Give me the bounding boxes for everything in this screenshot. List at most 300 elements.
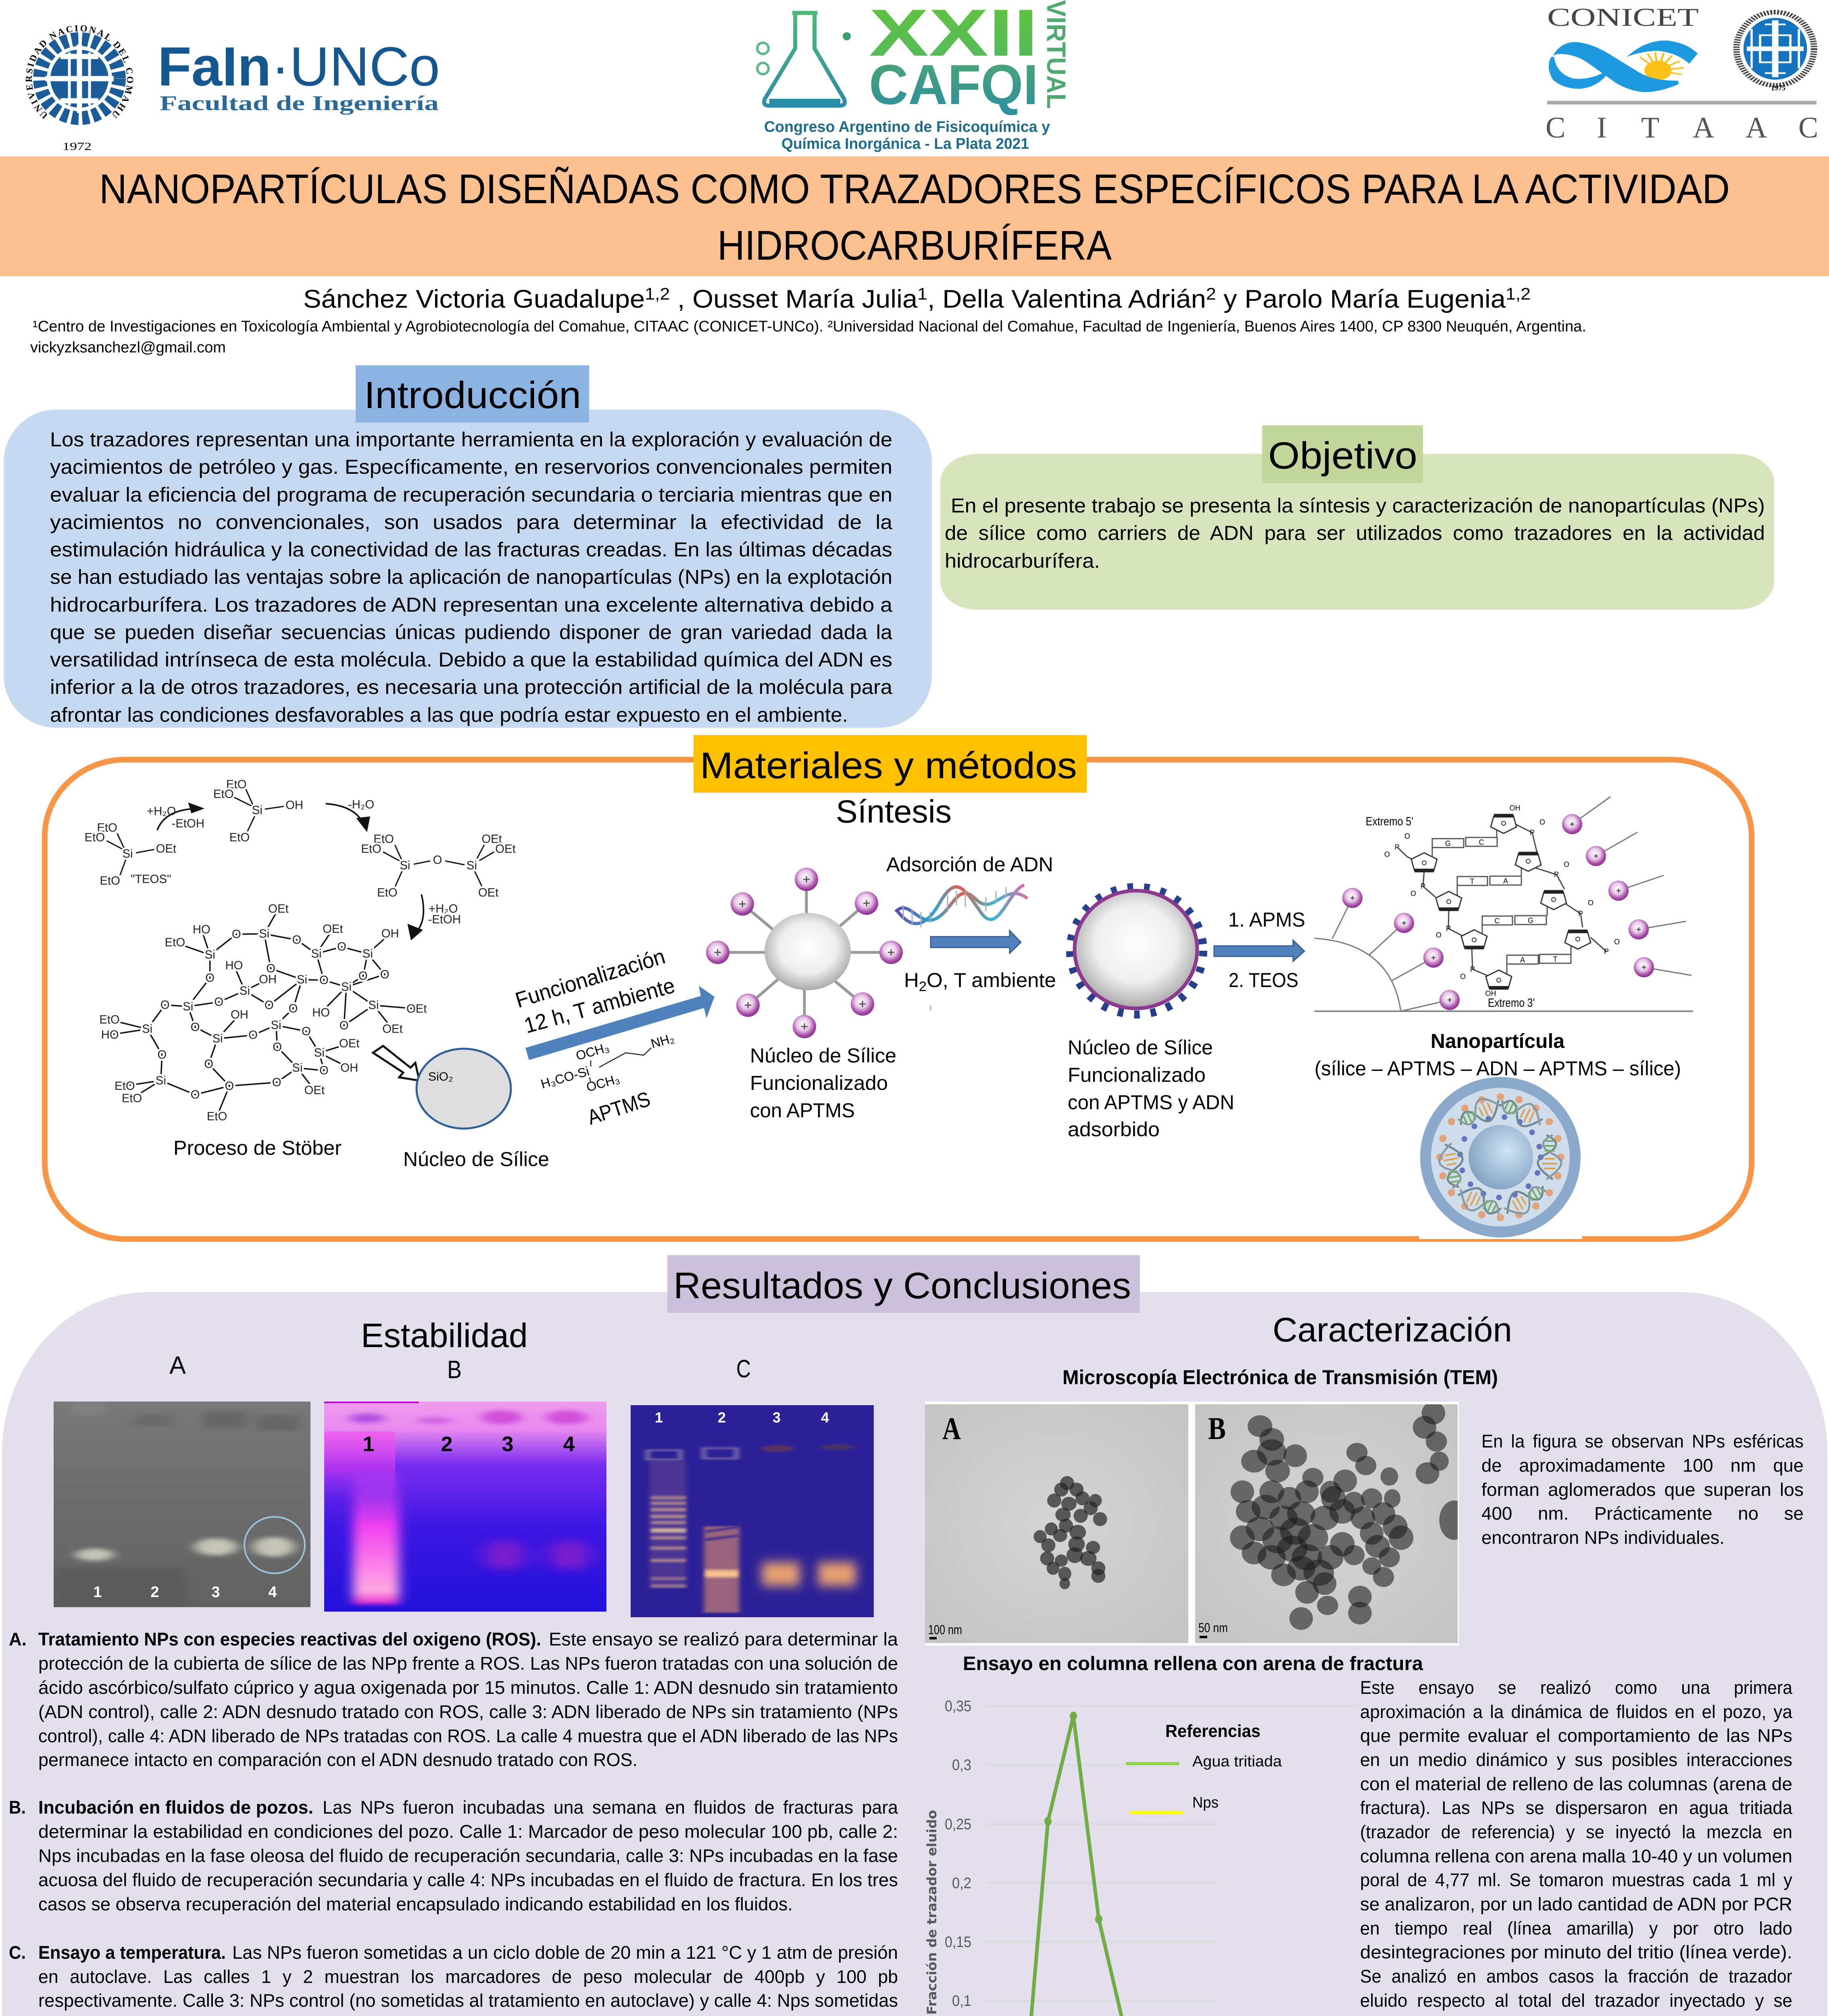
diagram: DNA on APTMS surface: P bbox=[1421, 882, 1425, 890]
diagram: DNA on APTMS surface: P bbox=[1604, 948, 1609, 956]
subheading: column test: Ensayo en columna rellena con arena de fractura bbox=[963, 1653, 1423, 1674]
TEM micrographs bbox=[925, 1402, 1469, 1645]
chemistry: Stöber process: HO bbox=[225, 959, 243, 972]
diagram: DNA on APTMS surface: T bbox=[1553, 955, 1557, 963]
label: núcleo con aptms y adn bbox=[1068, 1036, 1234, 1141]
text: column test description: que permite evaluar el comportamiento de las NPs bbox=[1360, 1725, 1792, 1746]
label: núcleo con aptms y adn: adsorbido bbox=[1068, 1118, 1160, 1141]
chemistry: Stöber process: O bbox=[160, 998, 170, 1012]
paragraph C: C. bbox=[9, 1942, 26, 1963]
chart: elution curves bbox=[924, 1698, 1541, 2016]
paragraph A: ácido ascórbico/sulfato cúprico y agua oxigenada por 15 minutos. Calle 1: ADN desnudo sin tratamiento bbox=[38, 1677, 898, 1698]
text: column test description: aproximación a la dinámica de fluidos en el pozo, ya bbox=[1360, 1702, 1793, 1722]
intro text: que se pueden diseñar secuencias únicas pudiendo disponer de gran variedad dada la bbox=[50, 621, 892, 644]
diagram: DNA on APTMS surface: Extremo 5' bbox=[1366, 815, 1413, 828]
chemistry: Stöber process: O bbox=[205, 971, 215, 985]
y axis labels: 0,1 bbox=[952, 1993, 971, 2010]
chemistry: Stöber process: Si bbox=[123, 847, 133, 860]
diagram: DNA on APTMS surface bbox=[1314, 797, 1693, 1011]
authors: , Ousset María Julia bbox=[670, 285, 918, 313]
chemistry: Stöber process: OH bbox=[231, 1008, 248, 1021]
molecule: APTMS: APTMS bbox=[585, 1087, 653, 1129]
white mask under nanoparticle image bbox=[1419, 1234, 1582, 1239]
logo: CONICET CITAAC: I bbox=[1597, 111, 1607, 144]
y axis labels: 0,25 bbox=[945, 1816, 971, 1833]
gel image A bbox=[54, 1402, 310, 1608]
gel label C: C bbox=[736, 1355, 751, 1383]
label: núcleo de sílice: Núcleo de Sílice bbox=[403, 1148, 549, 1170]
gel image B bbox=[324, 1402, 606, 1612]
authors: Sánchez Victoria Guadalupe bbox=[303, 285, 625, 313]
paragraph A bbox=[9, 1629, 898, 1770]
chemistry: Stöber process: Si bbox=[362, 947, 373, 960]
chemistry: Stöber process: O bbox=[273, 1040, 282, 1054]
logo: CONICET CITAAC: A bbox=[1693, 111, 1714, 144]
label: núcleo funcionalizado con aptms: Funcionalizado bbox=[750, 1072, 888, 1094]
chemistry: Stöber process bbox=[85, 778, 516, 1123]
paragraph B bbox=[9, 1797, 898, 1914]
logo: XXII CAFQI virtual: Congreso Argentino de Fisicoquímica y bbox=[764, 119, 1050, 135]
panel: resultados y conclusiones bbox=[2, 1255, 1827, 2016]
chemistry: Stöber process: Si bbox=[205, 948, 215, 962]
chemistry: Stöber process: OEt bbox=[268, 902, 289, 916]
paragraph A: (ADN control), calle 2: ADN desnudo tratado con ROS, calle 3: ADN liberado de NPs sin tratamiento (NPs bbox=[38, 1702, 898, 1722]
arrow: APMS TEOS: 2. TEOS bbox=[1229, 969, 1298, 991]
gel image B: 4 bbox=[563, 1433, 575, 1456]
functionalized nanoparticle bbox=[706, 868, 903, 1038]
label: funcionalización: 12 h, T ambiente bbox=[521, 973, 677, 1038]
chemistry: Stöber process: O bbox=[289, 1002, 298, 1015]
chemistry: Stöber process: Si bbox=[292, 1061, 302, 1075]
text: column test description: en tiempo real (línea amarilla) y por otro lado bbox=[1360, 1918, 1792, 1939]
label: nanopartícula: Nanopartícula bbox=[1431, 1030, 1565, 1052]
label: núcleo con aptms y adn: con APTMS y ADN bbox=[1068, 1091, 1234, 1114]
diagram: DNA on APTMS surface: P bbox=[1470, 965, 1475, 973]
diagram: DNA on APTMS surface: P bbox=[1395, 843, 1400, 851]
chemistry: Stöber process: EtO bbox=[99, 1013, 120, 1027]
chemistry: Stöber process: Si bbox=[341, 980, 352, 993]
chemistry: Stöber process: O bbox=[265, 999, 274, 1012]
TEM image B: B bbox=[1208, 1411, 1226, 1446]
chemistry: Stöber process: -EtOH bbox=[428, 913, 461, 926]
chemistry: Stöber process: Si bbox=[252, 804, 262, 817]
chemistry: Stöber process: Si bbox=[271, 1018, 281, 1032]
chemistry: Stöber process: O bbox=[204, 1057, 213, 1070]
chemistry: Stöber process: O bbox=[358, 969, 368, 983]
paragraph B: determinar la estabilidad en condiciones del pozo. Calle 1: Marcador de peso molecular 100 pb, calle 2: bbox=[38, 1821, 898, 1842]
chemistry: Stöber process: O bbox=[191, 1020, 200, 1034]
heading: objetivo: Objetivo bbox=[1268, 434, 1417, 477]
legend: Nps bbox=[1192, 1794, 1219, 1811]
chemistry: Stöber process: O bbox=[319, 1064, 329, 1077]
label: nanopartícula: (sílice – APTMS – ADN – APTMS – sílice) bbox=[1314, 1057, 1681, 1080]
chemistry: Stöber process: HO bbox=[312, 1006, 330, 1019]
molecule: APTMS: OCH₃ bbox=[585, 1071, 621, 1095]
diagram: DNA on APTMS surface: G bbox=[1528, 916, 1533, 925]
text: column test description: Se analizó en ambos casos la fracción de trazador bbox=[1360, 1966, 1792, 1987]
text: column test description: fractura). Las NPs se dispersaron en agua tritiada bbox=[1360, 1797, 1793, 1818]
intro text: Los trazadores representan una importante herramienta en la exploración y evaluación de bbox=[50, 428, 892, 451]
TEM image B bbox=[1195, 1402, 1469, 1643]
paragraph A: Este ensayo se realizó para determinar la bbox=[549, 1629, 898, 1649]
chemistry: Stöber process: O bbox=[214, 996, 223, 1009]
paragraph B: B. bbox=[9, 1797, 26, 1818]
chemistry: Stöber process: EtO bbox=[165, 936, 185, 949]
text: column test description: con el material de relleno de las columnas (arena de bbox=[1360, 1774, 1792, 1794]
chemistry: Stöber process: "TEOS" bbox=[131, 873, 171, 886]
panel: materiales y métodos bbox=[45, 735, 1752, 1239]
chemistry: Stöber process: OH bbox=[340, 1061, 358, 1075]
text: TEM description: encontraron NPs individuales. bbox=[1481, 1527, 1725, 1548]
paragraph A: permanece intacto en comparación con el ADN desnudo tratado con ROS. bbox=[38, 1749, 637, 1770]
intro text: evaluar la eficiencia del programa de recuperación secundaria o terciaria mientras que en bbox=[50, 483, 892, 506]
chemistry: Stöber process: OEt bbox=[323, 923, 343, 936]
header logos bbox=[0, 0, 1818, 152]
chemistry: Stöber process: EtO bbox=[361, 842, 381, 856]
label: núcleo funcionalizado con aptms: Núcleo de Sílice bbox=[750, 1044, 896, 1067]
text: column test description: Este ensayo se realizó como una primera bbox=[1360, 1677, 1793, 1698]
arrow: hollow to silica core bbox=[373, 1046, 419, 1081]
text: TEM description: forman aglomerados que superan los bbox=[1481, 1479, 1804, 1500]
intro text: inferior a la de otros trazadores, es necesaria una protección artificial de la molécula para bbox=[50, 676, 892, 698]
diagram: DNA on APTMS surface: O bbox=[1614, 938, 1620, 946]
intro text: estimulación hidráulica y la conectividad de las fracturas creadas. En las últimas décadas bbox=[50, 538, 892, 561]
logo: CONICET CITAAC: 1975 bbox=[1771, 84, 1785, 92]
text: column test description: columna rellena con arena malla 10-40 y un volumen bbox=[1360, 1846, 1792, 1866]
gel label A: A bbox=[169, 1352, 186, 1379]
intro text: afrontar las condiciones desfavorables a las que podría estar expuesto en el ambiente. bbox=[50, 704, 848, 726]
chemistry: Stöber process: OH bbox=[285, 799, 303, 812]
text: column test description: (trazador de referencia) y se inyectó la mezcla en bbox=[1360, 1822, 1792, 1842]
chemistry: Stöber process: EtO bbox=[377, 886, 398, 899]
gel label B: B bbox=[447, 1356, 462, 1384]
chemistry: Stöber process: Si bbox=[311, 947, 322, 960]
chemistry: Stöber process: Si bbox=[368, 999, 379, 1012]
chemistry: Stöber process: EtO bbox=[373, 832, 394, 846]
label: h2o t ambiente: O, T ambiente bbox=[927, 969, 1056, 991]
silica core bbox=[417, 1049, 511, 1129]
label: h2o t ambiente: 2 bbox=[919, 979, 927, 994]
chemistry: Stöber process: Si bbox=[259, 927, 269, 941]
authors: , Della Valentina Adrián bbox=[927, 285, 1206, 313]
label: adsorción de adn: Adsorción de ADN bbox=[886, 853, 1053, 876]
chemistry: Stöber process: OEt bbox=[481, 832, 502, 846]
diagram: DNA on APTMS surface: O bbox=[1436, 931, 1442, 939]
diagram: DNA on APTMS surface: P bbox=[1446, 925, 1451, 933]
intro text: se han estudiado las ventajas sobre la aplicación de nanopartículas (NPs) en la explotación bbox=[50, 566, 892, 588]
chemistry: Stöber process: O bbox=[232, 927, 241, 941]
y axis labels: 0,15 bbox=[945, 1934, 971, 1951]
logo: CONICET CITAAC bbox=[1546, 3, 1818, 144]
chemistry: Stöber process: OEt bbox=[382, 1023, 403, 1036]
label: proceso de stöber: Proceso de Stöber bbox=[173, 1137, 342, 1159]
intro text: yacimientos no convencionales, son usados para determinar la efectividad de la bbox=[50, 511, 892, 533]
heading: resultados y conclusiones bbox=[667, 1255, 1140, 1313]
text: TEM description bbox=[1481, 1431, 1804, 1548]
intro text bbox=[50, 428, 892, 726]
heading: estabilidad: Estabilidad bbox=[361, 1316, 528, 1354]
paragraph B: acuosa del fluido de recuperación secundaria y calle 4: NPs incubadas en el fluido de fractura. En los tres bbox=[38, 1870, 898, 1890]
diagram: DNA on APTMS surface: P bbox=[1578, 910, 1583, 918]
logo: CONICET CITAAC: C bbox=[1798, 111, 1818, 144]
text: TEM description: de aproximadamente 100 nm que bbox=[1481, 1455, 1804, 1476]
chemistry: Stöber process: O bbox=[302, 1025, 311, 1038]
chemistry: Stöber process: O bbox=[158, 1048, 167, 1061]
diagram: DNA on APTMS surface: O bbox=[1460, 973, 1466, 981]
molecule: APTMS: NH₂ bbox=[649, 1031, 676, 1051]
objective text bbox=[945, 494, 1765, 572]
chemistry: Stöber process: EtO bbox=[122, 1092, 142, 1105]
heading: materiales y métodos: Materiales y métodos bbox=[700, 745, 1077, 786]
legend: Referencias bbox=[1165, 1721, 1260, 1741]
paragraph B: casos se observa recuperación del material encapsulado indicando estabilidad en los fluidos. bbox=[38, 1894, 793, 1914]
icon: dna helix bbox=[896, 885, 1027, 927]
diagram: DNA on APTMS surface: C bbox=[1494, 917, 1500, 925]
text: column test description: se analizaron, por un lado cantidad de ADN por PCR bbox=[1360, 1894, 1792, 1914]
authors: y Parolo María Eugenia bbox=[1216, 285, 1506, 313]
paragraph A: protección de la cubierta de sílice de las NPp frente a ROS. Las NPs fueron tratadas con una solución de bbox=[38, 1653, 898, 1674]
gridlines bbox=[986, 1706, 1541, 2016]
authors: 2 bbox=[1206, 284, 1216, 303]
intro text: yacimientos de petróleo y gas. Específicamente, en reservorios convencionales permiten bbox=[50, 456, 892, 478]
text: column test description: desintegraciones por minuto del tritio (línea verde). bbox=[1360, 1942, 1792, 1962]
chemistry: Stöber process: -EtOH bbox=[172, 817, 204, 830]
diagram: DNA on APTMS surface: A bbox=[1520, 956, 1525, 964]
y axis labels: 0,2 bbox=[952, 1875, 971, 1892]
gel image B: 1 bbox=[363, 1433, 374, 1456]
chemistry: Stöber process: OH bbox=[381, 927, 399, 940]
label: núcleo con aptms y adn: Funcionalizado bbox=[1068, 1064, 1206, 1086]
affiliations: vickyzksanchezl@gmail.com bbox=[30, 339, 226, 356]
chemistry: Stöber process: O bbox=[319, 974, 329, 987]
objective text: hidrocarburífera. bbox=[945, 550, 1100, 572]
chemistry: Stöber process: OEt bbox=[156, 842, 176, 855]
text: stability results bbox=[9, 1629, 898, 2016]
diagram: DNA on APTMS surface: P bbox=[1554, 871, 1559, 879]
gel image C: 4 bbox=[821, 1409, 829, 1426]
paragraph C bbox=[9, 1942, 898, 2016]
title band: NANOPARTÍCULAS DISEÑADAS COMO TRAZADORES ESPECÍFICOS PARA LA ACTIVIDAD bbox=[99, 166, 1730, 212]
text: column test description: poral de 4,77 ml. Se tomaron muestras cada 1 ml y bbox=[1360, 1870, 1792, 1890]
panel: objetivo bbox=[940, 425, 1774, 610]
logo: Universidad Nacional del Comahue emblem: 1972 bbox=[62, 140, 92, 152]
logo: XXII CAFQI virtual: Química Inorgánica - La Plata 2021 bbox=[781, 135, 1029, 152]
logo: FaIn-UNCo: FaIn·UNCo bbox=[158, 36, 440, 98]
heading: resultados y conclusiones: Resultados y Conclusiones bbox=[673, 1265, 1131, 1306]
paragraph C: Las NPs fueron sometidas a un ciclo doble de 20 min a 121 °C y 1 atm de presión bbox=[232, 1942, 898, 1963]
chemistry: Stöber process: EtO bbox=[115, 1079, 135, 1093]
logo: CONICET CITAAC: CONICET bbox=[1547, 3, 1699, 31]
gel image A: 2 bbox=[150, 1584, 159, 1601]
affiliations bbox=[30, 318, 1586, 356]
TEM image A: A bbox=[942, 1411, 961, 1446]
objective text: En el presente trabajo se presenta la síntesis y caracterización de nanopartículas (NPs) bbox=[951, 494, 1765, 517]
authors: 1,2 bbox=[1506, 284, 1531, 303]
chemistry: Stöber process: EtO bbox=[97, 821, 117, 835]
core-shell nanoparticle bbox=[1420, 1077, 1581, 1237]
intro text: versatilidad intrínseca de esta molécula. Debido a que la estabilidad química del ADN es bbox=[50, 648, 892, 671]
chemistry: Stöber process: EtO bbox=[207, 1110, 227, 1123]
chemistry: Stöber process: Si bbox=[183, 1000, 193, 1013]
chemistry: Stöber process: EtO bbox=[100, 874, 120, 887]
heading: materiales y métodos bbox=[694, 735, 1087, 793]
chemistry: Stöber process: OEt bbox=[478, 886, 498, 899]
silica core: SiO₂ bbox=[428, 1070, 453, 1083]
legend: Agua tritiada bbox=[1192, 1753, 1282, 1770]
gel image C: 1 bbox=[655, 1409, 663, 1426]
logo: FaIn-UNCo: Facultad de Ingeniería bbox=[160, 92, 439, 115]
diagram: DNA on APTMS surface: O bbox=[1410, 889, 1416, 898]
diagram: DNA on APTMS surface: O bbox=[1539, 818, 1545, 826]
chemistry: Stöber process: OEt bbox=[406, 1002, 427, 1016]
chemistry: Stöber process: O bbox=[248, 1029, 258, 1042]
chemistry: Stöber process: Si bbox=[297, 973, 307, 986]
molecule: APTMS: H₃CO-Si bbox=[539, 1064, 591, 1091]
paragraph B: Incubación en fluidos de pozos. bbox=[38, 1797, 313, 1818]
chemistry: Stöber process: O bbox=[225, 1079, 234, 1093]
chemistry: Stöber process: O bbox=[292, 933, 301, 947]
paragraph C: respectivamente. Calle 3: NPs control (no sometidas al tratamiento en autoclave) y calle 4: Nps sometidas bbox=[38, 1990, 898, 2011]
paragraph A: control), calle 4: ADN liberado de NPs tratadas con ROS. La calle 4 muestra que el ADN liberado de las NPs bbox=[38, 1726, 898, 1746]
chemistry: Stöber process: OEt bbox=[495, 842, 516, 856]
title band bbox=[0, 156, 1829, 276]
diagram: DNA on APTMS surface: A bbox=[1503, 877, 1508, 885]
chemistry: Stöber process: EtO bbox=[85, 831, 105, 844]
gel image C: 3 bbox=[773, 1409, 781, 1426]
chemistry: Stöber process: EtO bbox=[226, 778, 246, 791]
chemistry: Stöber process: Si bbox=[240, 984, 250, 998]
paragraph C: en autoclave. Las calles 1 y 2 muestran los marcadores de peso molecular de 400pb y 100 pb bbox=[38, 1966, 898, 1987]
logo: CONICET CITAAC: C bbox=[1546, 111, 1565, 144]
gel image B: 3 bbox=[502, 1433, 513, 1456]
gel image A: 3 bbox=[211, 1584, 220, 1601]
chemistry: Stöber process: O bbox=[340, 1019, 349, 1032]
gel image B: 2 bbox=[441, 1433, 452, 1456]
chemistry: Stöber process: -H₂O bbox=[348, 798, 374, 811]
chemistry: Stöber process: Si bbox=[212, 1032, 223, 1045]
paragraph B: Las NPs fueron incubadas una semana en fluidos de fracturas para bbox=[323, 1797, 898, 1818]
paragraph B: Nps incubadas en la fase oleosa del fluido de recuperación secundaria, calle 3: NPs incubadas en la fase bbox=[38, 1845, 898, 1866]
gel image A: 1 bbox=[93, 1584, 102, 1601]
subheading: TEM: Microscopía Electrónica de Transmisión (TEM) bbox=[1062, 1366, 1498, 1389]
molecule: APTMS: OCH₃ bbox=[574, 1040, 611, 1063]
core with adsorbed DNA bbox=[1070, 887, 1203, 1014]
chemistry: Stöber process: EtO bbox=[229, 831, 250, 844]
objective text: de sílice como carriers de ADN para ser utilizados como trazadores en la actividad bbox=[945, 522, 1765, 544]
gel image C: 2 bbox=[718, 1409, 726, 1426]
chemistry: Stöber process: +H₂O bbox=[429, 902, 458, 916]
diagram: DNA on APTMS surface: OH bbox=[1510, 804, 1520, 812]
logo: XXII CAFQI virtual: CAFQI bbox=[869, 53, 1038, 116]
authors: 1 bbox=[917, 284, 927, 303]
chemistry: Stöber process: Si bbox=[467, 859, 477, 872]
y axis labels bbox=[945, 1698, 972, 2016]
chemistry: Stöber process: O bbox=[433, 853, 442, 866]
diagram: DNA on APTMS surface: OH bbox=[1485, 989, 1496, 998]
label: nanopartícula bbox=[1314, 1030, 1681, 1080]
diagram: DNA on APTMS surface: T bbox=[1470, 877, 1474, 885]
heading: introducción bbox=[356, 365, 589, 423]
molecule: APTMS bbox=[539, 1031, 676, 1129]
legend bbox=[1126, 1721, 1282, 1813]
affiliations: ¹Centro de Investigaciones en Toxicología Ambiental y Agrobiotecnología del Comahue, CITAAC (CONICET-UNCo). ²Universidad Nacional del Comahue, Facultad de Ingeniería, Buenos Aires 1400, CP 8300 Neuquén, Argentina. bbox=[33, 318, 1586, 335]
chemistry: Stöber process: HO bbox=[101, 1028, 119, 1041]
label: núcleo funcionalizado con aptms: con APTMS bbox=[750, 1099, 855, 1122]
chemistry: Stöber process: OH bbox=[259, 973, 277, 986]
heading: caracterización: Caracterización bbox=[1273, 1311, 1512, 1349]
authors: 1,2 bbox=[645, 284, 670, 303]
chemistry: Stöber process: HO bbox=[193, 923, 210, 936]
chemistry: Stöber process: Si bbox=[314, 1046, 325, 1060]
y axis labels: 0,3 bbox=[952, 1757, 971, 1774]
panel: introducción bbox=[4, 365, 932, 728]
logo: XXII CAFQI virtual: VIRTUAL bbox=[1042, 0, 1071, 109]
arrow: functionalization bbox=[525, 986, 715, 1060]
chemistry: Stöber process: Si bbox=[142, 1023, 152, 1036]
label: h2o t ambiente: H bbox=[904, 969, 919, 991]
chemistry: Stöber process: O bbox=[266, 962, 275, 975]
intro text: hidrocarburífera. Los trazadores de ADN representan una excelente alternativa debido a bbox=[50, 594, 892, 616]
chemistry: Stöber process: OEt bbox=[304, 1083, 325, 1097]
paragraph A: A. bbox=[9, 1629, 27, 1649]
diagram: DNA on APTMS surface: O bbox=[1588, 899, 1594, 907]
arrow: adsorption bbox=[931, 931, 1021, 953]
chemistry: Stöber process: O bbox=[272, 1076, 281, 1089]
chemistry: Stöber process: EtO bbox=[213, 787, 233, 801]
heading: objetivo bbox=[1262, 425, 1423, 483]
gel image A: 4 bbox=[268, 1584, 277, 1601]
chemistry: Stöber process: O bbox=[337, 940, 346, 954]
arrow: APMS TEOS: 1. APMS bbox=[1228, 908, 1305, 931]
diagram: DNA on APTMS surface: O bbox=[1404, 832, 1410, 840]
label: núcleo funcionalizado con aptms bbox=[750, 1044, 896, 1122]
text: column test description: en un medio dinámico y sus posibles interacciones bbox=[1360, 1749, 1792, 1770]
diagram: DNA on APTMS surface: O bbox=[1564, 860, 1569, 868]
logo: XXII CAFQI virtual bbox=[757, 0, 1071, 152]
subheading: síntesis: Síntesis bbox=[836, 793, 952, 829]
chemistry: Stöber process: OEt bbox=[339, 1037, 360, 1050]
diagram: DNA on APTMS surface: C bbox=[1479, 838, 1484, 846]
diagram: DNA on APTMS surface: P bbox=[1530, 829, 1535, 837]
chemistry: Stöber process: O bbox=[380, 968, 390, 981]
chemistry: Stöber process: +H₂O bbox=[147, 804, 176, 818]
chemistry: Stöber process: Si bbox=[400, 859, 410, 872]
y axis labels: 0,35 bbox=[945, 1698, 971, 1715]
TEM image A: 100 nm bbox=[928, 1622, 962, 1637]
gel image C bbox=[631, 1405, 874, 1617]
text: TEM description: En la figura se observan NPs esféricas bbox=[1481, 1431, 1804, 1452]
logo: CONICET CITAAC: T bbox=[1641, 111, 1659, 144]
chemistry: Stöber process: Si bbox=[156, 1074, 166, 1087]
text: TEM description: 400 nm. Prácticamente no se bbox=[1481, 1503, 1804, 1524]
paragraph C: Ensayo a temperatura. bbox=[38, 1942, 226, 1963]
text: column test description bbox=[1360, 1677, 1793, 2016]
paragraph A: Tratamiento NPs con especies reactivas del oxigeno (ROS). bbox=[38, 1629, 541, 1649]
text: column test description: eluido respecto al total del trazador inyectado y se bbox=[1360, 1990, 1792, 2011]
y axis title: Fracción de trazador eluido bbox=[924, 1810, 939, 2015]
logo: CONICET CITAAC: A bbox=[1746, 111, 1767, 144]
TEM image A bbox=[925, 1404, 1188, 1643]
diagram: DNA on APTMS surface: O bbox=[1384, 850, 1390, 858]
title band: HIDROCARBURÍFERA bbox=[717, 222, 1112, 269]
series: green agua tritiada bbox=[998, 1716, 1200, 2016]
diagram: DNA on APTMS surface: G bbox=[1445, 839, 1451, 848]
TEM image B: 50 nm bbox=[1198, 1620, 1228, 1635]
label: núcleo con aptms y adn: Núcleo de Sílice bbox=[1068, 1036, 1213, 1059]
chemistry: Stöber process: O bbox=[191, 1088, 200, 1101]
diagram: DNA on APTMS surface: Extremo 3' bbox=[1488, 996, 1535, 1010]
arrow: APMS TEOS bbox=[1214, 908, 1305, 991]
